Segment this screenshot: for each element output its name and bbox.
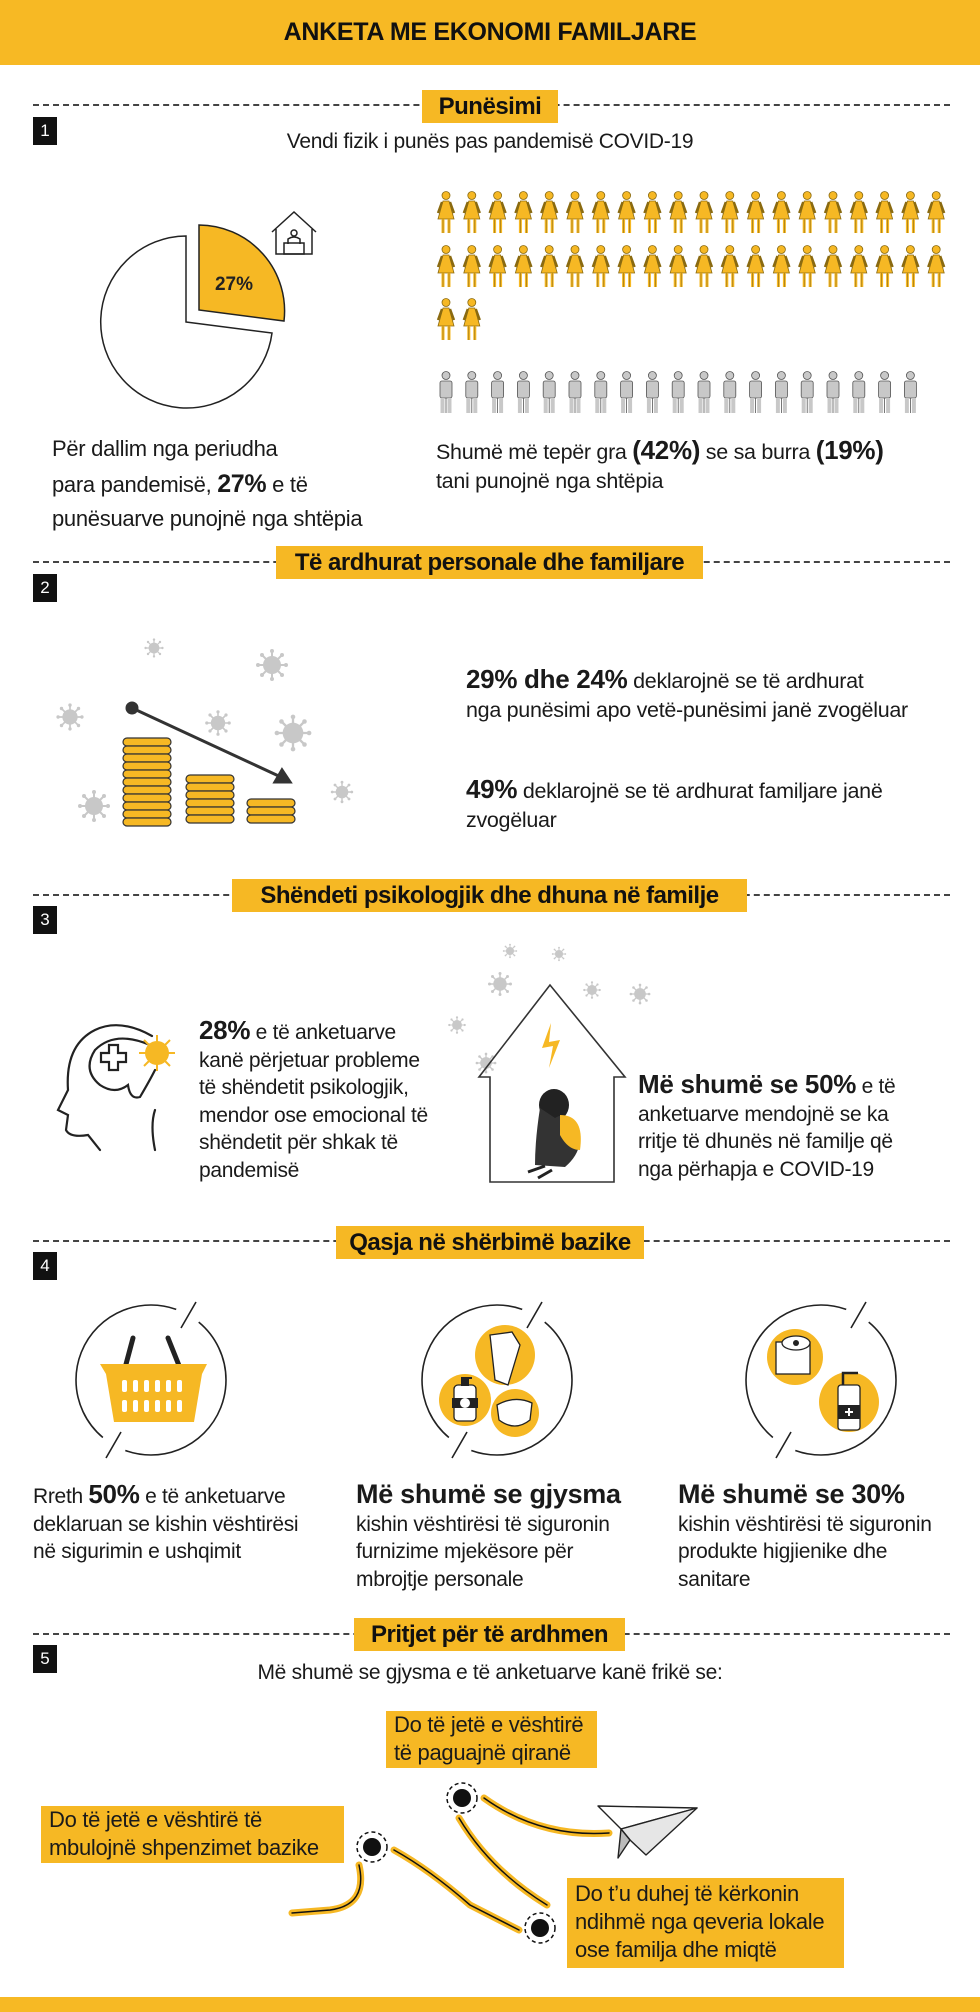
heading: Pritjet: Pritjet për të ardhmen [371,1621,608,1648]
text: hygiene: sanitare [678,1568,750,1590]
icon: basket [75,1302,227,1458]
text: 28% mental health: pandemisë [199,1158,299,1182]
heading: Shëndeti psikologjik: Shëndeti psikologjik dhe dhuna në familje [260,882,719,909]
text: domestic violence: anketuarve mendojnë se ka [638,1102,888,1126]
icon: hygiene products [745,1302,897,1458]
section number 3 [33,906,57,934]
text: 28% mental health: kanë përjetuar probleme [199,1048,420,1072]
text: family income: 49% deklarojnë se të ardhurat familjare janë [466,774,882,804]
text: hygiene [678,1479,932,1590]
roadmap lines, dots and plane [288,1782,698,1944]
heading: Punësimi [422,90,558,123]
section number 4: 4 [40,1256,50,1275]
callout: basic expenses [41,1806,344,1863]
text: food [33,1479,298,1563]
section number 2 [33,574,57,602]
text: 27% from home: Për dallim nga periudha [52,436,277,461]
callout: rent: të paguajnë qiranë [394,1740,571,1765]
pie chart 27% [100,211,316,409]
text: women vs men: tani punojnë nga shtëpia [436,469,663,493]
pie chart 27%: 27% [215,274,253,295]
callout: help: ndihmë nga qeveria lokale [575,1909,824,1934]
text: income decreased [466,664,908,722]
section number 4 [33,1252,57,1280]
text: 28% mental health: të shëndetit psikologjik, [199,1076,409,1099]
text: 27% from home: punësuarve punojnë nga shtëpia [52,506,362,531]
callout: basic expenses: Do të jetë e vështirë të [49,1807,262,1832]
pictogram: women and men [436,191,946,413]
illustration: coins and viruses [56,638,354,827]
subtitle 5: Më shumë se gjysma e të anketuarve kanë frikë se: [257,1661,723,1684]
footer band [0,1997,980,2012]
text: income decreased: nga punësimi apo vetë-punësimi janë zvogëluar [466,698,908,722]
callout: rent: Do të jetë e vështirë [394,1712,583,1737]
heading: Qasja: Qasja në shërbimë bazike [349,1229,631,1256]
text: medical supplies [356,1479,622,1590]
subtitle 1: Vendi fizik i punës pas pandemisë COVID-19 [287,130,693,153]
text: income decreased: 29% dhe 24% deklarojnë se të ardhurat [466,664,863,694]
text: food: Rreth 50% e të anketuarve [33,1479,285,1509]
arrow: decreasing [127,703,290,782]
text: medical supplies: kishin vështirësi të siguronin [356,1512,610,1536]
callout: help: ose familja dhe miqtë [575,1937,777,1962]
text: family income [466,774,882,832]
heading: Të ardhurat: Të ardhurat personale dhe familjare [295,549,684,576]
text: hygiene: Më shumë se 30% [678,1479,905,1509]
text: domestic violence: Më shumë se 50% e të [638,1069,895,1099]
section number 5: 5 [40,1649,50,1668]
text: domestic violence: nga përhapja e COVID-19 [638,1158,874,1180]
icon: house with woman and viruses [448,944,650,1183]
heading: Punësimi: Punësimi [439,93,541,120]
text: domestic violence: rritje të dhunës në familje që [638,1130,893,1153]
header banner [0,0,980,65]
text: women vs men [436,435,884,493]
text: 28% mental health [199,1015,428,1182]
text: women vs men: Shumë më tepër gra (42%) se sa burra (19%) [436,435,884,465]
icon: protective supplies [421,1302,573,1458]
text: food: në sigurimin e ushqimit [33,1540,241,1563]
section number 1 [33,117,57,145]
callout: help [567,1878,844,1968]
text: 28% mental health: 28% e të anketuarve [199,1015,396,1045]
callout: rent [386,1711,597,1768]
text: medical supplies: Më shumë se gjysma [356,1479,621,1509]
section number 2: 2 [40,578,50,597]
section number 1: 1 [40,121,50,140]
text: domestic violence [638,1069,895,1180]
icon: head with virus [56,1024,175,1152]
text: 27% from home: para pandemisë, 27% e të [52,470,308,498]
section number 5 [33,1645,57,1673]
text: medical supplies: mbrojtje personale [356,1568,523,1590]
callout: basic expenses: mbulojnë shpenzimet bazike [49,1835,319,1860]
section number 3: 3 [40,910,50,929]
text: food: deklaruan se kishin vështirësi [33,1512,298,1536]
callout: help: Do t’u duhej të kërkonin [575,1881,799,1906]
text: hygiene: kishin vështirësi të siguronin [678,1512,932,1536]
text: family income: zvogëluar [466,808,557,832]
icon: home office [272,212,316,254]
text: 28% mental health: shëndetit për shkak të [199,1131,398,1154]
text: 28% mental health: mendor ose emocional të [199,1104,428,1126]
icon: paper plane [598,1806,697,1858]
header banner: ANKETA ME EKONOMI FAMILJARE [284,18,696,46]
text: hygiene: produkte higjienike dhe [678,1540,887,1563]
text: 27% from home [52,436,363,531]
text: medical supplies: furnizime mjekësore për [356,1540,573,1563]
